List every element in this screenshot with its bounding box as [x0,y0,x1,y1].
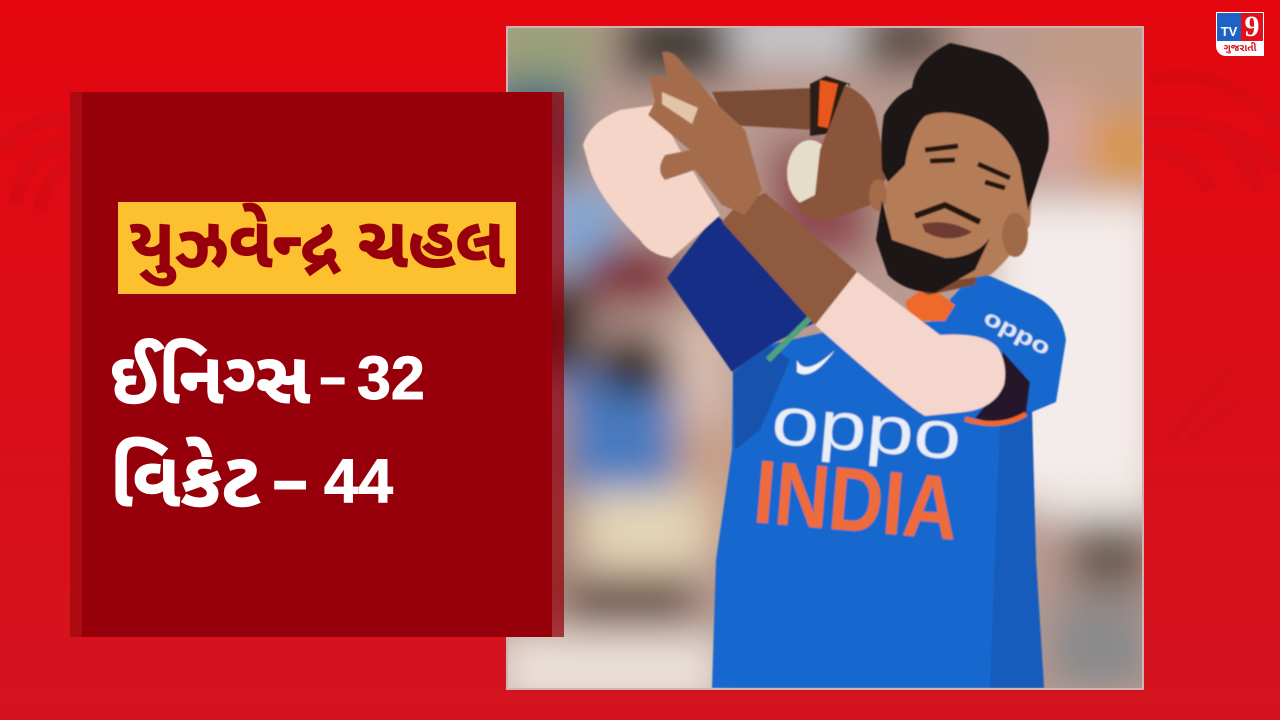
nike swoosh [797,350,835,374]
stat: wickets: – [274,449,306,514]
eyes and moustache [925,146,1010,188]
pale forearm sleeve [815,272,1005,416]
wristband [810,76,850,136]
blurred crowd [508,28,1142,688]
neck [922,276,978,296]
stat: wickets: વિકેટ [110,437,259,523]
ear [869,179,887,211]
cricket ball [786,139,823,204]
stat: innings: 32 [357,344,425,412]
stat: innings [110,338,425,419]
name label: યુઝવેન્દ્ર ચહલ [129,204,505,283]
stat: wickets [110,436,394,523]
face [885,100,1034,285]
jersey body [712,272,1066,688]
collar [905,285,955,321]
card left edge [70,92,82,637]
fist [795,85,888,220]
jersey lettering [756,313,1050,541]
upper pale sleeve [583,105,720,258]
card right edge [552,92,564,637]
stat: innings: – [321,354,344,401]
photo panel: bowler [506,26,1144,690]
jersey lettering: INDIA [750,442,962,560]
logo caption: ગુજરાતી [1224,43,1256,54]
logo blue block: TV [1221,24,1237,39]
dark sleeve [667,214,820,372]
hand [648,52,762,215]
raised wrist and forearm [712,88,815,130]
logo blue block [1217,13,1241,41]
card main fill [82,92,552,637]
hair [881,43,1049,210]
far ear [1002,213,1028,257]
logo: TV9 Gujarati [1216,12,1264,56]
jersey lettering: oppo [769,382,965,475]
panel: stats card [70,92,564,637]
stat: wickets: 44 [324,447,393,516]
logo red block [1241,13,1263,41]
beard [876,200,990,293]
jersey lettering: oppo [980,304,1055,360]
bowling forearm [722,193,857,325]
trim [768,316,812,360]
stat: innings: ઈનિગ્સ [110,339,310,419]
